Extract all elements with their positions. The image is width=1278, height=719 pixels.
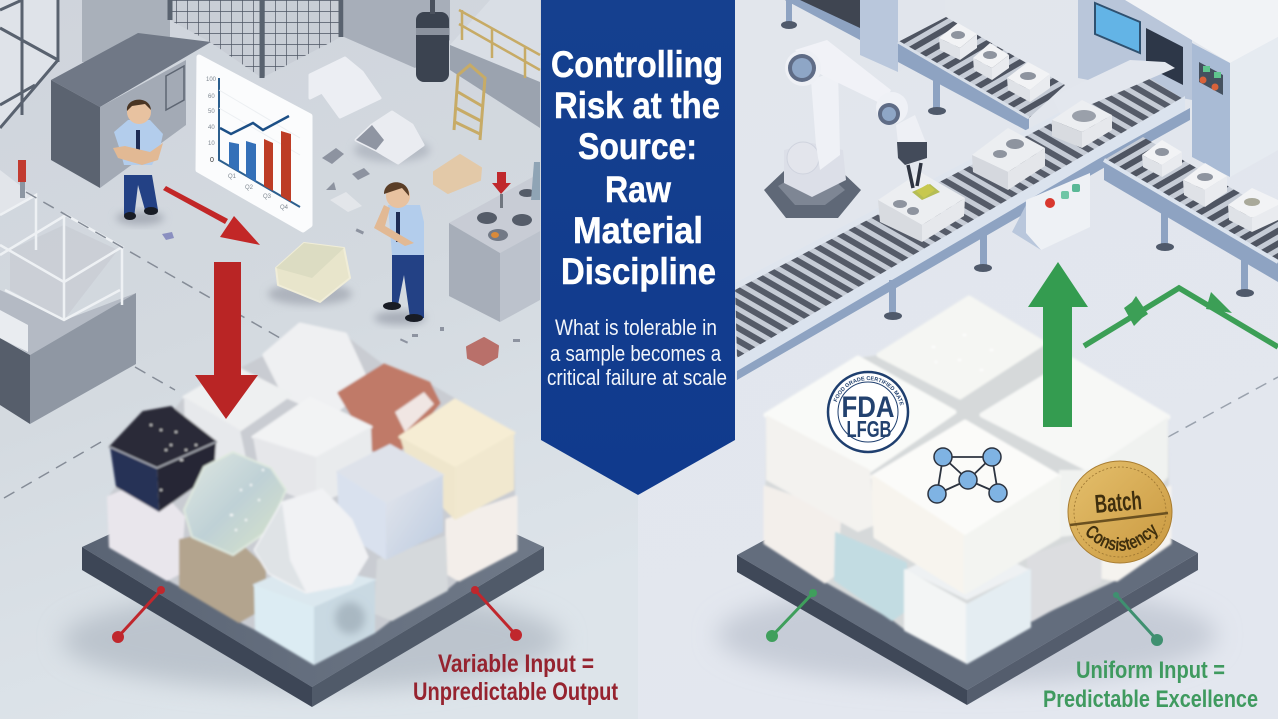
parts on main conveyor [878,100,1112,242]
chart axis labels: Q4 [280,205,289,211]
right conveyor leg [1156,207,1174,251]
green process line [1084,288,1278,347]
chart axis labels: 60 [208,94,215,100]
cube pile [765,298,1170,663]
white rock front [255,490,367,592]
machine screen [1095,3,1140,53]
hopper bar [1052,60,1175,117]
grey equipment cabinet [51,33,211,188]
red pointer right [471,586,522,641]
chart axis labels: 50 [208,109,215,115]
stack shadow [62,590,562,690]
orange block [434,155,481,193]
caption: variable input: Unpredictable Output [413,678,619,706]
white lower-right cube [447,497,516,580]
robot lower body [784,143,846,197]
caption: uniform input [1043,657,1258,713]
right conveyor leg [1236,257,1254,297]
cream cube [400,400,514,520]
chart axis labels: 0 [210,157,214,164]
FDA LFGB badge [826,370,910,454]
pale plate under sensor [0,170,35,215]
yellow ladder [454,65,485,140]
batch consistency seal: Consistency [1086,524,1158,551]
translucent green rock [184,452,286,555]
second conveyor [898,17,1065,132]
chart bars [229,131,291,202]
small red block [467,338,498,365]
subtitle [547,315,727,390]
caption: uniform input: Uniform Input = [1076,657,1225,684]
worried worker right [374,182,426,325]
robot base [764,170,861,218]
back top cube [879,298,1043,397]
title: Risk at the [554,85,720,126]
raised platform with yellow railing [450,0,540,128]
subtitle: critical failure at scale [547,365,727,390]
machine top [1125,0,1278,63]
chart axis labels: Q3 [263,194,272,200]
green chip highlight [916,184,935,198]
title: Source: [578,126,697,167]
lower clear cube [375,537,447,620]
chart axis labels [206,77,289,211]
lower left machine block [0,290,136,424]
FDA LFGB badge: FOOD GRADE CERTIFIED MATERIAL [833,376,904,406]
left panel background: floor [0,0,640,719]
title: Discipline [561,251,716,292]
machine indicator buttons [1199,62,1223,95]
left top cube [766,358,954,532]
title: Controlling [551,44,723,85]
left factory scene [0,0,540,498]
base plate [737,430,1198,705]
glass cage [0,195,122,320]
green pointer right [1113,592,1163,646]
back building block [344,0,450,68]
upper-left conveyor segment [781,0,860,40]
robot wrist [896,115,926,143]
control machine with samples [449,162,540,322]
chart axis labels: 40 [208,125,215,131]
chart board [198,57,310,230]
subtitle: What is tolerable in [555,315,717,340]
chart axis labels: 100 [206,77,217,83]
caption: variable input: Variable Input = [438,650,594,678]
front lower cube [905,540,1030,663]
chart axis labels: 10 [208,141,215,147]
dashed flow line right [1168,377,1278,437]
robot shoulder joint [785,50,821,86]
conveyor leg [974,235,992,272]
chart trend line [220,116,289,134]
stack shadow [717,585,1217,685]
chart axis labels: Q2 [245,185,254,191]
raw rock white 2 [354,112,430,163]
right factory scene [735,0,1278,437]
right top cube [982,360,1168,537]
robot elbow joint [876,92,908,125]
control box [1012,173,1090,250]
part with gripper target [878,172,965,242]
glass blue cube [835,533,906,620]
front top cube [873,422,1059,593]
conveyor leg [884,280,902,320]
pile fill [765,298,1170,663]
keypad [1146,28,1183,85]
white cube back-left [184,367,290,500]
dark cylinder tank [416,0,449,82]
right panel background: floor [638,0,1278,719]
banner shape [541,0,735,495]
robot arm [764,40,927,218]
back wall column [82,0,170,62]
dark speckled rock [110,407,216,512]
dashed flow lines [4,192,280,498]
light blue cube [254,565,375,665]
batch consistency seal: Batch [1093,485,1143,519]
centre title banner [541,0,735,495]
grey lower cube [1028,533,1100,620]
lilac white cube [108,480,184,580]
far right lower cube [1100,487,1170,580]
green pointer left [766,589,817,642]
white rock back [265,325,368,415]
raw rock white 1 [310,58,380,117]
tall white cabinet [860,0,945,72]
clear cube [337,445,443,560]
chart axis labels: Q1 [228,174,237,180]
main conveyor belt [735,70,1190,380]
parts on second conveyor [939,23,1050,102]
FDA LFGB badge: FDA [842,391,894,424]
red pointer left [112,586,165,643]
machine front face [1078,0,1278,177]
debris shards [162,148,520,344]
big red down arrow [195,262,258,419]
title: Material [573,210,703,251]
white big centre cube [253,398,373,505]
batch consistency seal [1068,460,1172,564]
machine column [1192,43,1230,177]
cube pile [108,325,516,665]
title: Raw [605,169,671,210]
thin red arrow [163,186,260,245]
window frame [0,0,60,130]
parts on right conveyor [1142,140,1278,232]
subtitle: a sample becomes a [550,341,722,366]
pile fill [108,325,516,665]
FDA LFGB badge: LFGB [846,416,892,442]
tan cube [180,530,265,622]
right conveyor [1104,137,1278,297]
title [551,44,723,292]
molecule network icon [928,448,1007,503]
worried worker left [113,100,164,225]
left stack: variable raw materials [62,262,619,707]
red-brown rock [339,365,439,450]
fence [170,0,341,78]
caption: variable input [413,650,619,706]
red sensor post [18,160,26,198]
robot forearm [795,40,891,105]
translucent yellow rock [268,243,352,305]
lower left cube [765,487,840,582]
big green up arrow [1028,262,1088,427]
robot upper arm [811,70,840,170]
base plate [82,440,544,707]
